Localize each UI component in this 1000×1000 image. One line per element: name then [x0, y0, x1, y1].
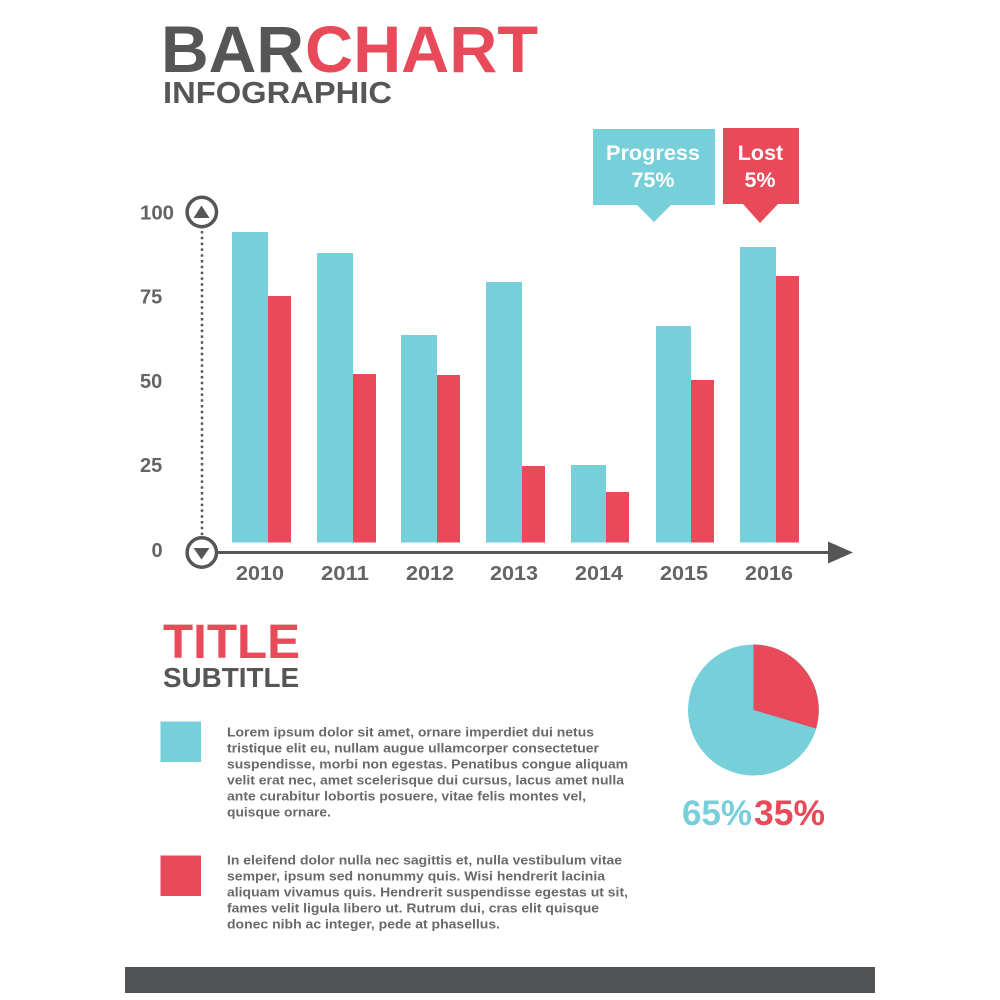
x axis year labels: 2011	[321, 562, 369, 585]
text block: second paragraph: semper, ipsum sed nonummy quis. Wisi hendrerit lacinia	[227, 870, 606, 884]
text block: second paragraph: aliquam vivamus quis. Hendrerit suspendisse egestas ut sit,	[227, 886, 628, 900]
text block: first paragraph: quisque ornare.	[227, 806, 331, 820]
callout: lost 5%: Lost	[738, 141, 783, 165]
x axis year labels	[236, 562, 793, 585]
legend swatch: red	[160, 856, 201, 896]
x axis arrow	[216, 542, 853, 564]
x axis year labels: 2016	[745, 562, 793, 585]
pie percentages: 35%	[754, 794, 825, 833]
bar chart	[140, 197, 853, 585]
text block: second paragraph	[227, 854, 628, 932]
heading: title and subtitle	[163, 616, 300, 693]
bars 2011	[317, 253, 376, 542]
pie percentages: 65%	[682, 794, 752, 833]
x axis year labels: 2014	[575, 562, 624, 585]
title: bar chart infographic: CHART	[305, 12, 538, 86]
y axis dotted line	[201, 231, 203, 537]
callout: lost 5%: 5%	[744, 168, 776, 192]
callout: lost 5%	[723, 128, 799, 223]
callout: progress 75%	[593, 129, 715, 222]
bars 2014	[571, 465, 629, 542]
y axis labels: 25	[140, 455, 162, 477]
text block: first paragraph: ante curabitur lobortis posuere, vitae felis montes vel,	[227, 790, 586, 804]
text block: second paragraph: fames velit ligula libero ut. Rutrum dui, cras elit quisque	[227, 902, 599, 916]
bars 2013	[486, 282, 545, 542]
pie percentages	[682, 794, 825, 833]
x axis year labels: 2013	[490, 562, 538, 585]
callout: progress 75%: 75%	[631, 168, 675, 192]
y axis labels: 50	[140, 371, 162, 393]
y axis labels: 100	[140, 202, 174, 224]
text block: first paragraph: suspendisse, morbi non egestas. Penatibus congue aliquam	[227, 758, 628, 772]
icon: axis bottom circle with down triangle	[187, 538, 216, 567]
heading: title and subtitle: SUBTITLE	[163, 662, 299, 693]
icon: axis top circle with up triangle	[187, 197, 216, 227]
y axis labels	[140, 202, 174, 562]
x axis year labels: 2015	[660, 562, 708, 585]
text block: first paragraph: tristique elit eu, nullam augue ullamcorper consectetuer	[227, 742, 599, 756]
bars 2016	[740, 247, 799, 542]
callout: progress 75%: Progress	[606, 141, 700, 165]
y axis labels: 75	[140, 286, 162, 308]
footer bar	[125, 967, 875, 993]
heading: title and subtitle: TITLE	[163, 616, 300, 669]
bars 2015	[656, 326, 714, 542]
title: bar chart infographic	[161, 12, 538, 110]
bars 2010	[232, 232, 291, 542]
text block: first paragraph: velit erat nec, amet scelerisque dui cursus, lacus amet nulla	[227, 774, 625, 788]
bars 2012	[401, 335, 460, 542]
title: bar chart infographic: BAR	[161, 12, 304, 86]
pie chart	[688, 644, 819, 776]
y axis labels: 0	[152, 540, 163, 562]
title: bar chart infographic: INFOGRAPHIC	[163, 75, 392, 110]
text block: second paragraph: In eleifend dolor nulla nec sagittis et, nulla vestibulum vitae	[227, 854, 622, 868]
text block: first paragraph: Lorem ipsum dolor sit amet, ornare imperdiet dui netus	[227, 726, 594, 740]
text block: first paragraph	[227, 726, 628, 820]
x axis year labels: 2010	[236, 562, 284, 585]
x axis year labels: 2012	[406, 562, 454, 585]
legend swatch: blue	[160, 722, 201, 762]
text block: second paragraph: donec nibh ac integer, pede at phasellus.	[227, 918, 500, 932]
